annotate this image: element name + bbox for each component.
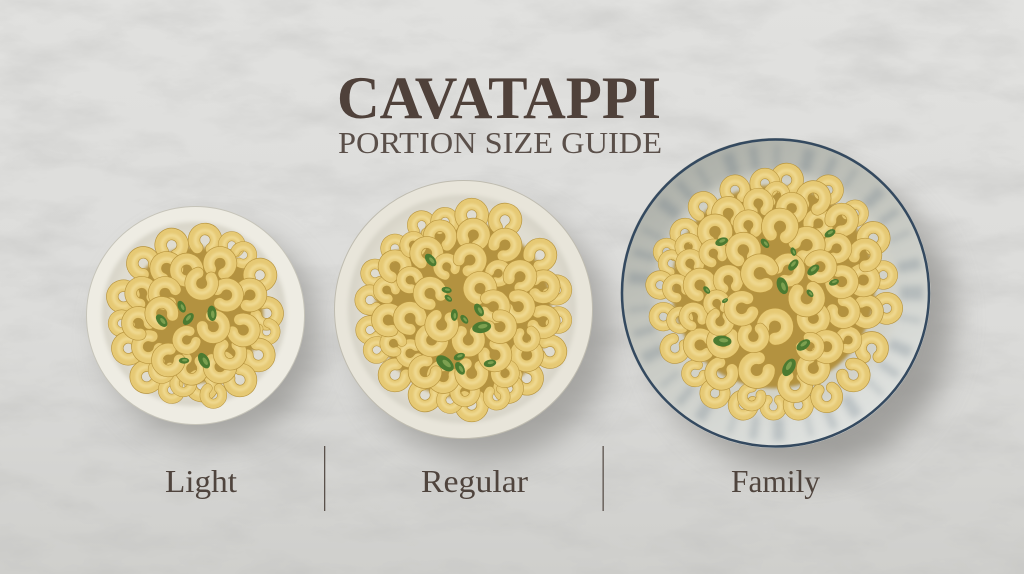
divider: light and regular bbox=[324, 446, 325, 511]
regular portion herbs bbox=[423, 252, 497, 376]
family portion herbs bbox=[702, 227, 840, 378]
light portion herbs bbox=[154, 299, 217, 370]
label: Regular: Regular bbox=[421, 463, 528, 499]
family portion pasta bbox=[647, 167, 899, 419]
label: Light: Light bbox=[165, 463, 237, 499]
panel: light portion plate bbox=[86, 206, 320, 442]
family plate glaze streaks bbox=[640, 157, 912, 429]
panel: regular portion plate bbox=[334, 180, 612, 460]
subtitle: PORTION SIZE GUIDE bbox=[338, 125, 662, 160]
panel: family portion plate bbox=[620, 138, 954, 472]
title: CAVATAPPI bbox=[337, 65, 661, 131]
label: Family: Family bbox=[731, 463, 820, 499]
light portion pasta bbox=[108, 228, 282, 404]
regular portion pasta bbox=[359, 204, 570, 416]
divider: regular and family bbox=[602, 446, 604, 511]
family plate blue rim bbox=[622, 140, 929, 446]
